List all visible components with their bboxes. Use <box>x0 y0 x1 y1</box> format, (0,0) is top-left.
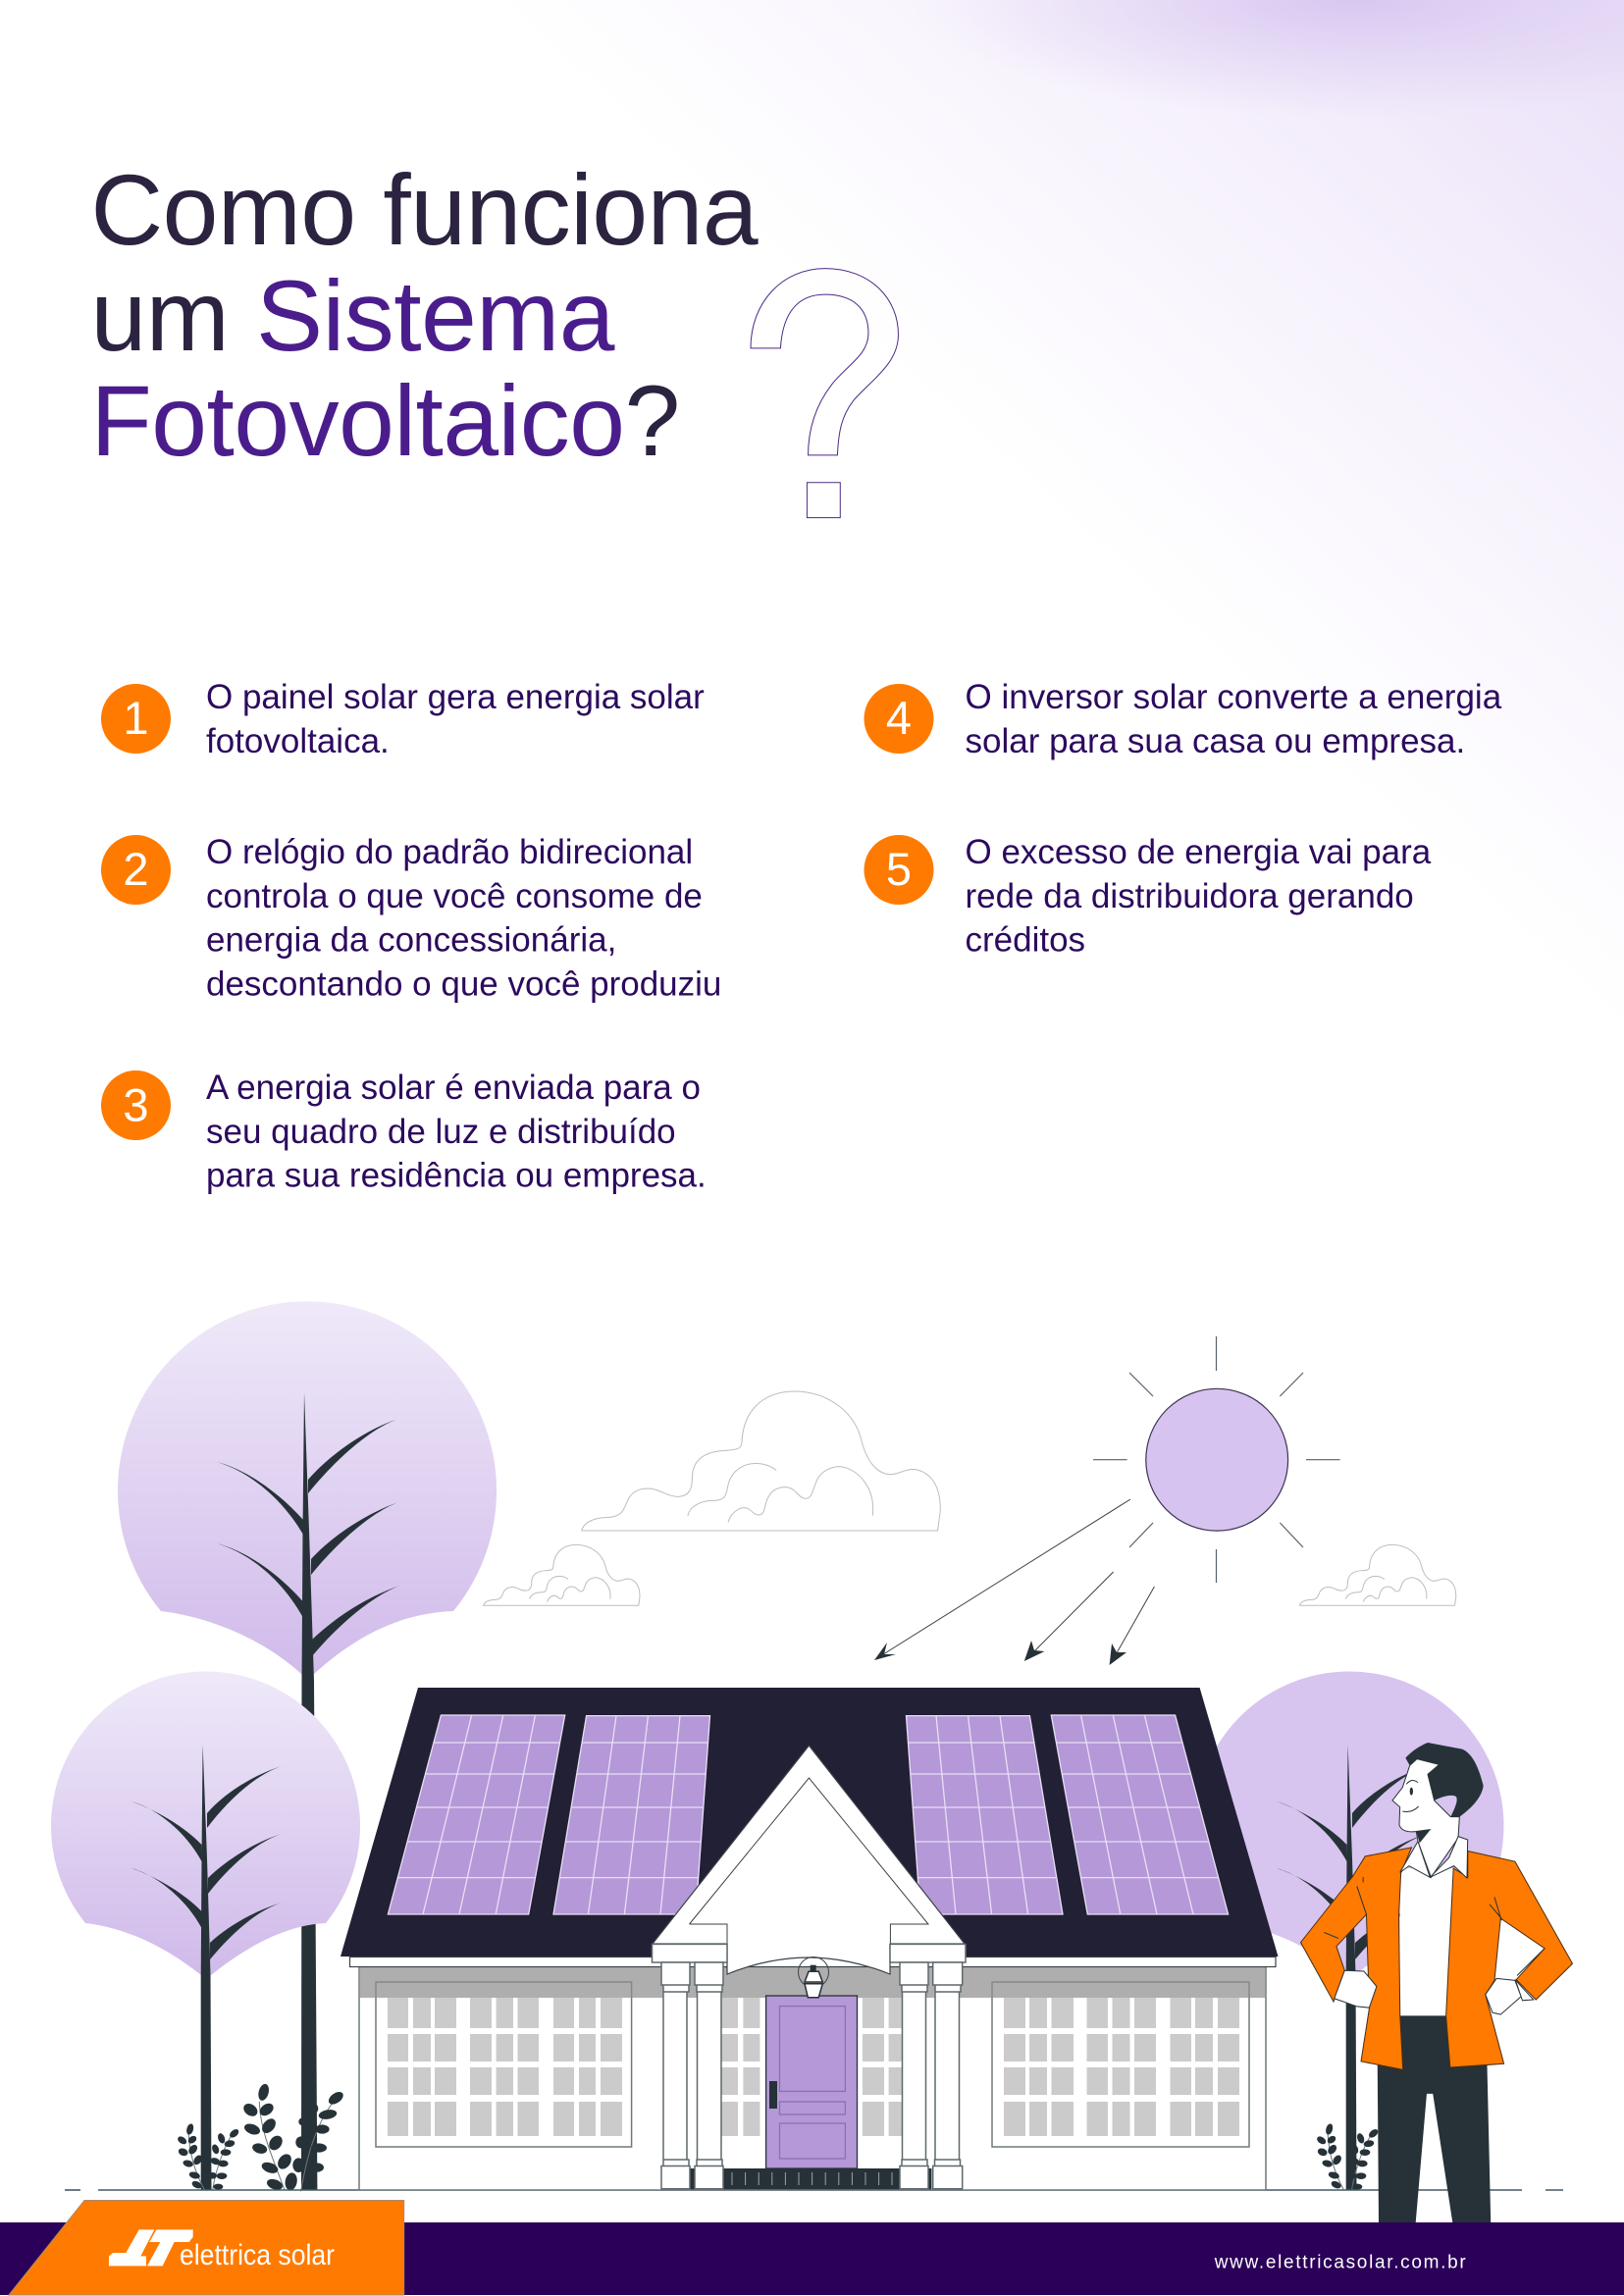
plant: small pair <box>177 2123 240 2190</box>
solar panel 2 <box>553 1716 710 1914</box>
logo mark <box>109 2229 193 2266</box>
step 2: controla o que você consome de <box>206 877 703 915</box>
pediment <box>652 1746 966 1974</box>
house wall <box>359 1966 1266 2190</box>
step 2: descontando o que você produziu <box>206 965 721 1003</box>
big cloud <box>582 1391 940 1531</box>
collar <box>1400 1837 1468 1878</box>
man waist <box>1400 2015 1450 2069</box>
man shirt <box>1399 1868 1453 2016</box>
steps <box>690 2168 931 2189</box>
ground line <box>65 2189 1563 2191</box>
plant: large pair <box>241 2083 345 2192</box>
step 1: O painel solar gera energia solar <box>206 678 705 716</box>
step 3: 3 <box>123 1079 149 1130</box>
orange logo tab <box>9 2200 404 2295</box>
small cloud right <box>1299 1544 1456 1605</box>
step 3: A energia solar é enviada para o <box>206 1069 701 1107</box>
door <box>766 1996 858 2168</box>
man jacket left <box>1301 1848 1411 2069</box>
step 2: energia da concessionária, <box>206 921 616 960</box>
man legs <box>1378 2064 1491 2222</box>
right window <box>992 1982 1249 2147</box>
clouds <box>484 1391 1456 1605</box>
step 2 <box>101 833 721 1003</box>
neck shadow <box>1416 1829 1431 1843</box>
step 1: fotovoltaica. <box>206 722 390 760</box>
shaded eave band <box>359 1966 1266 1998</box>
step 2: O relógio do padrão bidirecional <box>206 833 693 871</box>
man hands <box>1335 1970 1534 2014</box>
website url: www.elettricasolar.com.br <box>1214 2252 1466 2272</box>
small tree <box>51 1672 360 2190</box>
plants right of house <box>1316 2123 1380 2190</box>
step 4: 4 <box>886 692 912 744</box>
eye <box>1410 1788 1413 1796</box>
solar panel 3 <box>907 1716 1063 1914</box>
step 5: O excesso de energia vai para <box>966 833 1432 871</box>
step 5 <box>864 833 1432 960</box>
face and neck <box>1392 1759 1459 1877</box>
step 4: O inversor solar converte a energia <box>966 678 1502 716</box>
step 3: seu quadro de luz e distribuído <box>206 1113 676 1151</box>
jacket seams <box>1324 1877 1545 1975</box>
man head <box>1392 1743 1484 1878</box>
icon: sun <box>1093 1336 1340 1583</box>
logo wordmark: elettrica solar <box>180 2239 335 2271</box>
step 1: 1 <box>123 692 149 744</box>
step 1 <box>101 678 705 760</box>
man body <box>1301 1848 1572 2222</box>
man jacket right <box>1446 1852 1572 2067</box>
step 4: solar para sua casa ou empresa. <box>966 722 1465 760</box>
step 4 <box>864 678 1502 760</box>
step 3: para sua residência ou empresa. <box>206 1157 707 1195</box>
title <box>90 154 759 477</box>
step 5: 5 <box>886 843 912 895</box>
big tree <box>118 1301 497 2190</box>
title: Como funciona <box>90 154 759 266</box>
tree behind the man <box>1195 1672 1503 2190</box>
solar panel 4 <box>1051 1715 1229 1914</box>
step 2: 2 <box>123 843 149 895</box>
house <box>341 1688 1278 2190</box>
step 5: créditos <box>966 921 1085 960</box>
brow and smile <box>1402 1781 1419 1812</box>
footer bar <box>0 2222 1624 2295</box>
title: Fotovoltaico? <box>90 365 680 477</box>
columns <box>661 1962 963 2189</box>
step 3 <box>101 1069 707 1195</box>
title: um Sistema <box>90 260 615 372</box>
porch lamp <box>799 1957 828 1998</box>
hair <box>1405 1743 1484 1817</box>
porch windows <box>721 1998 903 2136</box>
step 5: rede da distribuidora gerando <box>966 877 1414 915</box>
solar panel 1 <box>388 1715 565 1914</box>
plants left of house <box>177 2083 345 2192</box>
left window <box>376 1982 632 2147</box>
roof <box>341 1688 1278 1957</box>
arrows from sun to roof <box>874 1499 1154 1665</box>
small cloud left <box>484 1544 640 1605</box>
icon: outlined question mark <box>751 269 898 518</box>
fascia <box>349 1957 1276 1966</box>
